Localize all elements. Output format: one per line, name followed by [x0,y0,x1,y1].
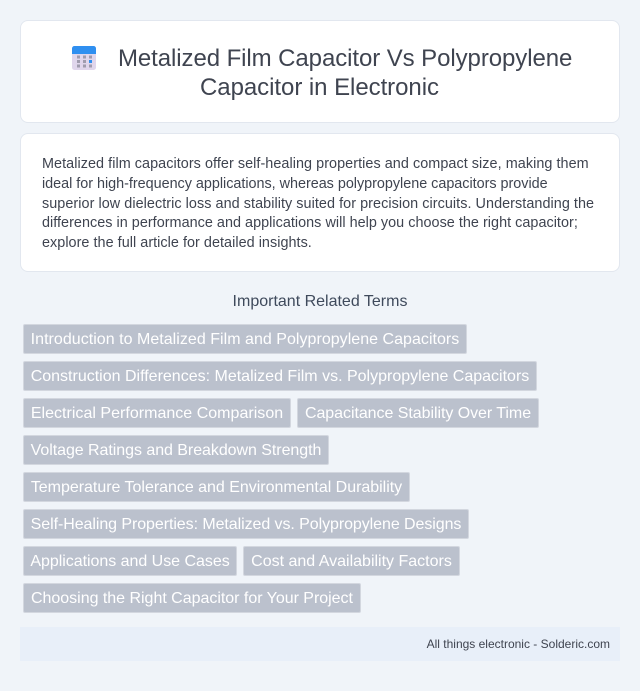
description text: differences in performance and applications will help you choose the right capacitor; [42,215,578,231]
tag: introduction: Introduction to Metalized Film and Polypropylene Capacitors [31,331,459,348]
tag: construction: Construction Differences: Metalized Film vs. Polypropylene Capacitors [31,368,529,385]
tag: voltage ratings: Voltage Ratings and Breakdown Strength [31,442,321,459]
tag: applications [23,546,237,576]
description text: ideal for high-frequency applications, whereas polypropylene capacitors provide [42,176,548,192]
footer text: All things electronic - Solderic.com [427,637,610,651]
tag: applications: Applications and Use Cases [30,553,230,570]
icon: calendar [72,46,96,70]
description card [20,133,620,272]
section heading: Important Related Terms [233,293,407,310]
tag list [23,324,539,613]
tag: temperature [23,472,410,502]
tag: choosing [23,583,361,613]
title card [20,20,620,123]
tag: introduction [23,324,467,354]
footer [20,627,620,661]
tag: capacitance stability [297,398,539,428]
description text: Metalized film capacitors offer self-healing properties and compact size, making them [42,156,589,172]
tag: construction [23,361,537,391]
description text: explore the full article for detailed insights. [42,235,312,251]
tag: self-healing: Self-Healing Properties: Metalized vs. Polypropylene Designs [31,516,461,533]
title: Metalized Film Capacitor Vs Polypropylene [118,45,572,72]
tag: cost: Cost and Availability Factors [251,553,452,570]
tag: capacitance stability: Capacitance Stability Over Time [305,405,531,422]
description text [42,156,594,251]
description text: superior low dielectric loss and stability suited for precision circuits. Understanding the [42,196,594,212]
tag: temperature: Temperature Tolerance and Environmental Durability [31,479,402,496]
tag: choosing: Choosing the Right Capacitor for Your Project [31,590,353,607]
tag: electrical performance: Electrical Performance Comparison [31,405,283,422]
tag: electrical performance [23,398,291,428]
tag: voltage ratings [23,435,329,465]
title: Capacitor in Electronic [200,74,439,101]
tag: cost [243,546,460,576]
title [118,45,572,101]
tag: self-healing [23,509,469,539]
